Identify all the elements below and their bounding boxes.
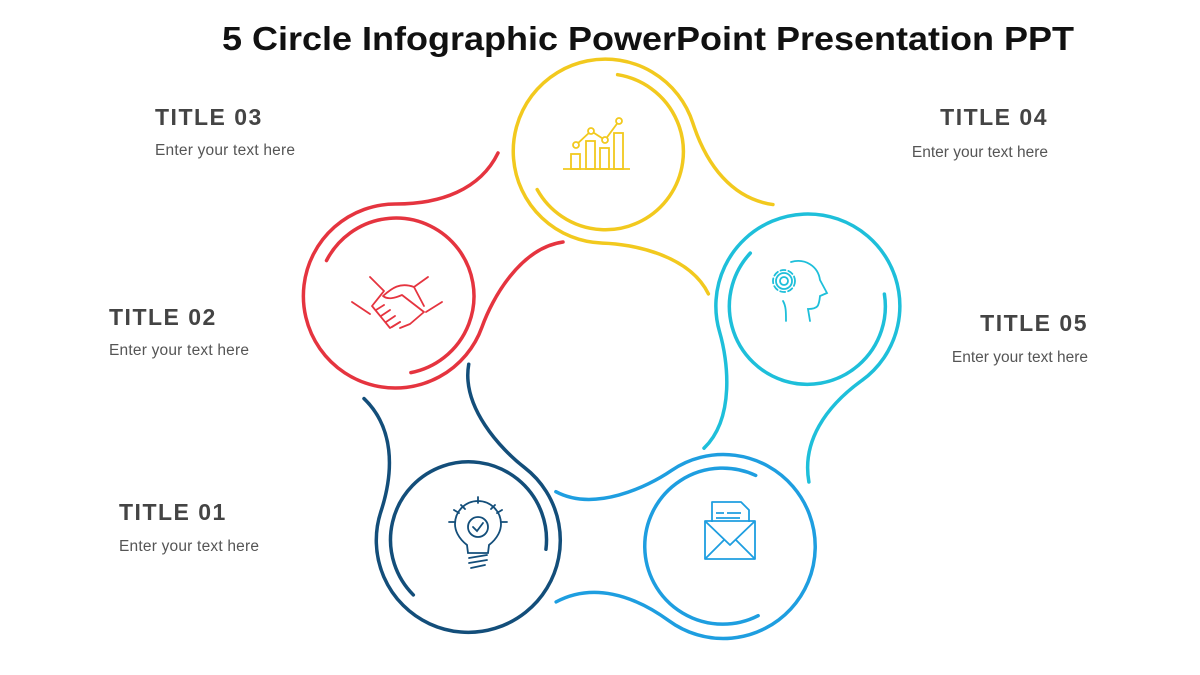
text: title 04 [912,104,1048,161]
icon: handshake [352,277,442,328]
text: title 04: TITLE 04 [940,104,1048,130]
node: cyan head [618,177,966,520]
text: title 01: TITLE 01 [119,499,227,525]
node: red handshake [303,153,563,388]
text: title 05: TITLE 05 [980,310,1088,336]
title: 5 Circle Infographic PowerPoint Presentation PPT [222,20,1074,57]
text: title 03: TITLE 03 [155,104,263,130]
text: title 05: Enter your text here [952,349,1088,366]
text: title 01: Enter your text here [119,538,259,555]
icon: bulb [449,497,507,568]
text: title 05 [952,310,1088,366]
text: title 02: TITLE 02 [109,304,217,330]
node: dark bulb [304,337,608,656]
icon: chart [563,118,630,169]
text: title 01 [119,499,259,555]
text: title 02: Enter your text here [109,342,249,359]
text: title 03 [155,104,295,159]
text: title 02 [109,304,249,359]
node: yellow chart [489,19,793,339]
icon: head with gear [773,261,827,321]
text: title 04: Enter your text here [912,144,1048,161]
node: blue envelope [504,374,852,675]
text: title 03: Enter your text here [155,142,295,159]
icon: envelope [705,502,755,559]
